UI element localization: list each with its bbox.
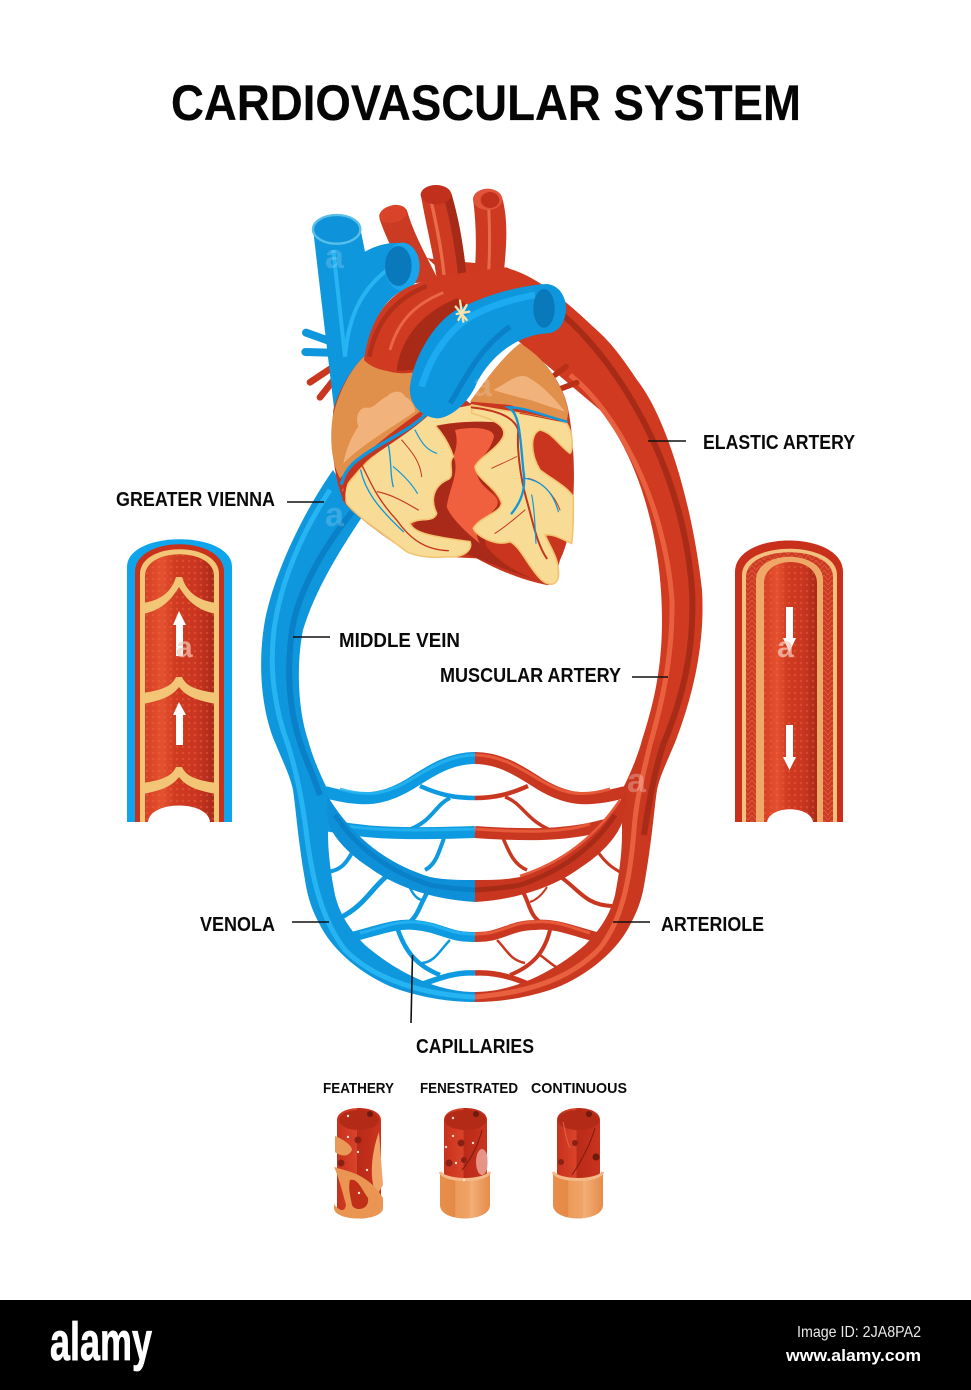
light fat patch right (493, 376, 565, 412)
watermark marks: a (627, 762, 647, 800)
left fat lobe (343, 415, 471, 557)
label: feathery: FEATHERY (323, 1080, 394, 1097)
capillary: fenestrated (440, 1108, 490, 1218)
label: capillaries: CAPILLARIES (416, 1036, 534, 1058)
arrow up 1 (173, 611, 186, 656)
label: continuous: CONTINUOUS (531, 1080, 627, 1097)
aortic branches (377, 185, 506, 283)
footer logo: alamy (50, 1312, 152, 1372)
label: greater vienna: GREATER VIENNA (116, 489, 275, 511)
leader: greater vienna (287, 501, 324, 503)
light fat patch left (343, 392, 415, 463)
leader: capillaries (411, 955, 412, 1023)
label: middle vein: MIDDLE VEIN (339, 630, 460, 652)
arteriole inner band (475, 790, 627, 902)
leader: elastic artery (648, 440, 686, 442)
leader: middle vein (293, 636, 330, 638)
artery highlights on bands (475, 755, 610, 934)
coronary veins (342, 407, 567, 543)
right fat lobe (472, 405, 573, 584)
arrow down 1 (783, 607, 796, 652)
footer bar (0, 1300, 971, 1390)
arrow down 2 (783, 725, 796, 770)
watermark marks: a (325, 238, 345, 276)
circulation loop: veins, arteries and capillaries (261, 258, 703, 1002)
leader: arteriole (613, 921, 650, 923)
leader: muscular artery (632, 676, 668, 678)
leader: venola (292, 921, 329, 923)
vein shading (272, 490, 475, 997)
small side vessels (305, 333, 577, 397)
artery shading (475, 298, 692, 997)
label: elastic artery: ELASTIC ARTERY (703, 432, 856, 454)
aortic arch (364, 267, 543, 372)
title: CARDIOVASCULAR SYSTEM (171, 75, 801, 131)
ligament (456, 301, 469, 322)
artery: arteriole arc (475, 740, 676, 1002)
inner light chamber (447, 428, 498, 543)
pulmonary artery (410, 284, 566, 418)
watermark marks: a (473, 366, 493, 404)
top fat band (422, 405, 503, 427)
label: muscular artery: MUSCULAR ARTERY (440, 665, 622, 687)
footer image id: Image ID: 2JA8PA2 (797, 1324, 921, 1341)
capillary: continuous (553, 1108, 603, 1218)
label: venola: VENOLA (200, 914, 275, 936)
vein highlights on bands (340, 755, 475, 934)
heart (305, 185, 577, 585)
heart body (332, 343, 574, 585)
vein: greater, middle and venule arc (261, 470, 475, 1002)
artery tube cross-section (735, 540, 843, 822)
venule inner band (327, 795, 475, 902)
artery: elastic, muscular (427, 258, 703, 740)
watermark marks (325, 238, 647, 800)
footer url: www.alamy.com (785, 1346, 921, 1365)
label: arteriole: ARTERIOLE (661, 914, 764, 936)
capillary network, artery side (475, 758, 625, 985)
vein tube cross-section (127, 539, 232, 822)
capillary network, vein side (325, 758, 475, 985)
arrow up 2 (173, 702, 186, 745)
upper left orange muscle (331, 357, 423, 478)
upper right orange muscle (470, 343, 568, 423)
vein tube cross-section: a (176, 631, 193, 664)
artery tube cross-section: a (777, 631, 794, 664)
inner dark chamber (410, 422, 537, 580)
watermark marks: a (325, 496, 345, 534)
capillary: feathery (334, 1108, 383, 1218)
label: fenestrated: FENESTRATED (420, 1080, 518, 1097)
superior vena cava (313, 215, 420, 408)
coronary arteries (344, 407, 565, 558)
